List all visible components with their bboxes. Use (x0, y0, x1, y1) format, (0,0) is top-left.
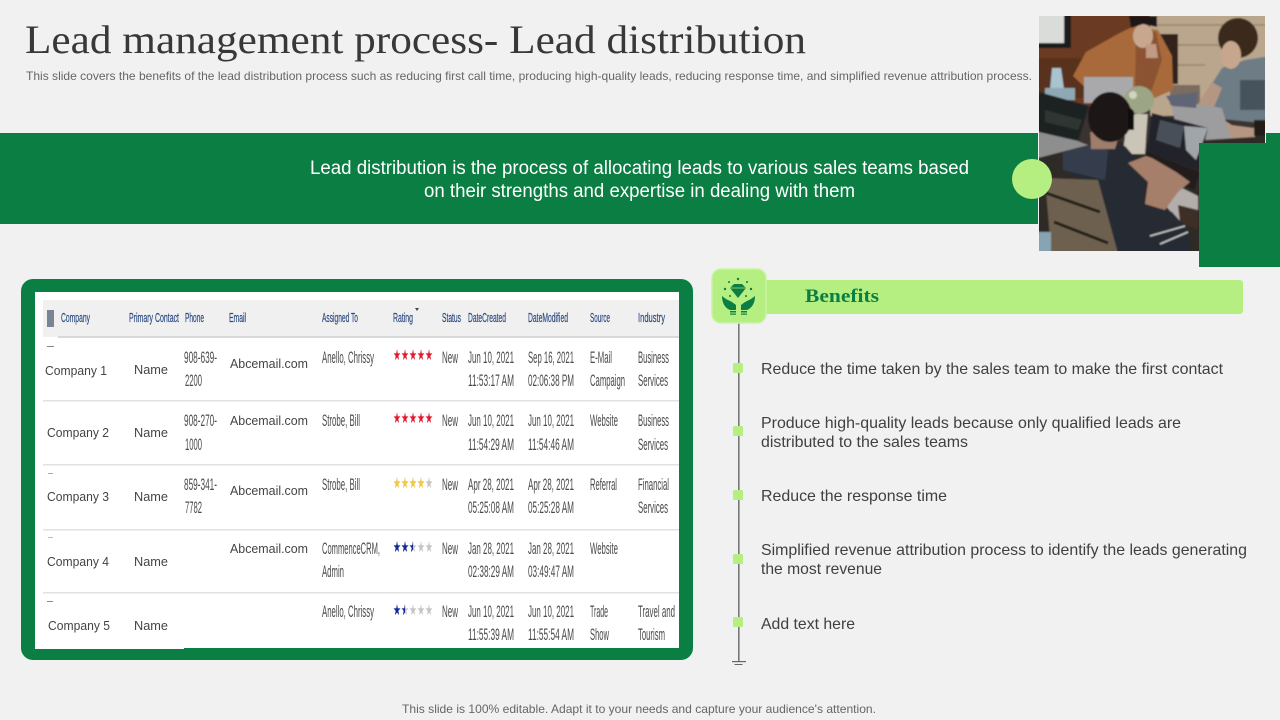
table row: Company 4: Website (590, 539, 618, 558)
photo: team working on laptops (1039, 16, 1265, 251)
banner right edge (1266, 133, 1280, 153)
table row: Company 4: Abcemail.com (230, 542, 308, 556)
table header row (43, 300, 679, 338)
table row: Company 1: New (442, 348, 458, 367)
green square accent (1199, 143, 1280, 267)
table row: Company 3: Services (638, 498, 668, 517)
table row: Company 2: Name (134, 426, 168, 440)
benefits heading bar: Benefits (805, 286, 879, 307)
table row: Company 5: ★★★★★ (393, 601, 433, 619)
title: Lead management process- Lead distribution (25, 17, 806, 62)
panel: lead table: Business (638, 348, 669, 367)
table row: Company 1: Abcemail.com (230, 357, 308, 371)
banner statement (310, 158, 969, 202)
table row: Company 2: 11:54:29 AM (468, 435, 514, 454)
table row: Company 3 (43, 464, 679, 517)
benefits heading bar (762, 280, 1243, 314)
benefit item 2 (733, 415, 1181, 451)
table row: Company 4: Company 4 (47, 555, 109, 569)
table row: Company 1: Company 1 (45, 364, 107, 378)
benefit item 2: Produce high-quality leads because only qualified leads are (761, 415, 1181, 432)
table row: Company 4: 02:38:29 AM (468, 562, 514, 581)
table row: Company 2: 11:54:46 AM (528, 435, 574, 454)
table row: Company 1: 02:06:38 PM (528, 371, 574, 390)
table row: Company 5: Jun 10, 2021 (528, 602, 574, 621)
table row: Company 1: Anello, Chrissy (322, 348, 374, 367)
table row: Company 1: Name (134, 363, 168, 377)
green table frame (21, 279, 693, 660)
table header row: Assigned To (322, 310, 358, 325)
table row: Company 3: Referral (590, 475, 617, 494)
table row: Company 2: Services (638, 435, 668, 454)
table row: Company 1: 11:53:17 AM (468, 371, 514, 390)
table row: Company 4: Name (134, 555, 168, 569)
table row: Company 3: Financial (638, 475, 669, 494)
table row: Company 2: Website (590, 411, 618, 430)
benefit item 4: the most revenue (761, 561, 882, 578)
table header row: Phone (185, 310, 204, 325)
table row: Company 2: Strobe, Bill (322, 411, 360, 430)
table row: Company 4 (43, 529, 679, 581)
benefit item 5: Add text here (761, 616, 855, 633)
table row: Company 2: New (442, 411, 458, 430)
table row: Company 2: ★★★★★ (393, 409, 433, 427)
table row: Company 4: CommenceCRM, (322, 539, 380, 558)
table header row: Source (590, 310, 610, 325)
benefit item 2: distributed to the sales teams (761, 434, 968, 451)
table row: Company 5: Show (590, 625, 609, 644)
icon: hands holding diamond (712, 269, 766, 323)
table row: Company 3: Name (134, 490, 168, 504)
benefit item 1: Reduce the time taken by the sales team to make the first contact (761, 361, 1224, 378)
table row: Company 2: Abcemail.com (230, 414, 308, 428)
banner statement: on their strengths and expertise in dealing with them (424, 181, 855, 202)
green banner (0, 133, 1038, 224)
benefit item 4 (733, 542, 1247, 578)
table row: Company 5: Anello, Chrissy (322, 602, 374, 621)
table row: Company 5: Trade (590, 602, 608, 621)
table row: Company 1: E-Mail (590, 348, 612, 367)
table row: Company 3: 7782 (185, 498, 202, 517)
table row: Company 2: Company 2 (47, 426, 109, 440)
table header row: Primary Contact (129, 310, 179, 325)
light green circle accent (1012, 159, 1052, 199)
panel: lead table (21, 279, 693, 660)
table row: Company 2: Jun 10, 2021 (468, 411, 514, 430)
table row: Company 5: Tourism (638, 625, 665, 644)
table row: Company 2: 1000 (185, 435, 202, 454)
table row: Company 3: Abcemail.com (230, 484, 308, 498)
table row: Company 1: 2200 (185, 371, 202, 390)
table row: Company 3: New (442, 475, 458, 494)
table row: Company 2: Business (638, 411, 669, 430)
table row: Company 1: Campaign (590, 371, 625, 390)
table row: Company 3: 05:25:28 AM (528, 498, 574, 517)
table row: Company 5: 11:55:39 AM (468, 625, 514, 644)
table row: Company 4: 03:49:47 AM (528, 562, 574, 581)
subtitle description: This slide covers the benefits of the lead distribution process such as reducing first call time, producing high-quality leads, reducing response time, and simplified revenue attribution process. (26, 69, 1032, 83)
table row: Company 5: Jun 10, 2021 (468, 602, 514, 621)
table row: Company 1: ★★★★★ (393, 346, 433, 364)
table row: Company 5: ★★★★★ (393, 601, 433, 619)
table row: Company 2 (43, 400, 679, 454)
table row: Company 2: Jun 10, 2021 (528, 411, 574, 430)
table row: Company 3: Apr 28, 2021 (528, 475, 574, 494)
table row: Company 4: ★★★★★ (393, 538, 433, 556)
table header row: Status (442, 310, 461, 325)
table header row: Industry (638, 310, 665, 325)
footer note: This slide is 100% editable. Adapt it to your needs and capture your audience's attention. (402, 702, 876, 716)
table row: Company 1: 908-639- (184, 348, 217, 367)
table header row: DateCreated (468, 310, 506, 325)
table row: Company 5: Company 5 (48, 619, 110, 633)
table row: Company 4: Jan 28, 2021 (528, 539, 574, 558)
table row: Company 4: Jan 28, 2021 (468, 539, 514, 558)
table row: Company 3: Strobe, Bill (322, 475, 360, 494)
table header row: DateModified (528, 310, 568, 325)
table row: Company 3: 05:25:08 AM (468, 498, 514, 517)
table header row: Email (229, 310, 246, 325)
panel: lead table: Services (638, 371, 668, 390)
table row: Company 5: Travel and (638, 602, 675, 621)
benefit item 3: Reduce the response time (761, 488, 947, 505)
table row: Company 3: ★★★★★ (393, 474, 433, 492)
table row: Company 3: 859-341- (184, 475, 217, 494)
table row: Company 4: Admin (322, 562, 344, 581)
table header row: Company (61, 310, 90, 325)
timeline vertical line (732, 320, 746, 665)
table row: Company 1: Jun 10, 2021 (468, 348, 514, 367)
table row: Company 3: Apr 28, 2021 (468, 475, 514, 494)
banner statement: Lead distribution is the process of allocating leads to various sales teams based (310, 158, 969, 179)
table screenshot background (35, 292, 679, 649)
benefit item 4: Simplified revenue attribution process to identify the leads generating (761, 542, 1247, 559)
table row: Company 1 (45, 346, 669, 390)
table row: Company 4: ★★★★★ (393, 538, 433, 556)
table row: Company 4: New (442, 539, 458, 558)
table row: Company 2: 908-270- (184, 411, 217, 430)
table header row: Rating (393, 310, 413, 325)
table row: Company 5: New (442, 602, 458, 621)
table row: Company 1: Sep 16, 2021 (528, 348, 574, 367)
table row: Company 3: ★★★★★ (393, 474, 433, 492)
table row: Company 3: Company 3 (47, 490, 109, 504)
table row: Company 5: 11:55:54 AM (528, 625, 574, 644)
table row: Company 5: Name (134, 619, 168, 633)
table row: Company 5 (43, 592, 679, 644)
